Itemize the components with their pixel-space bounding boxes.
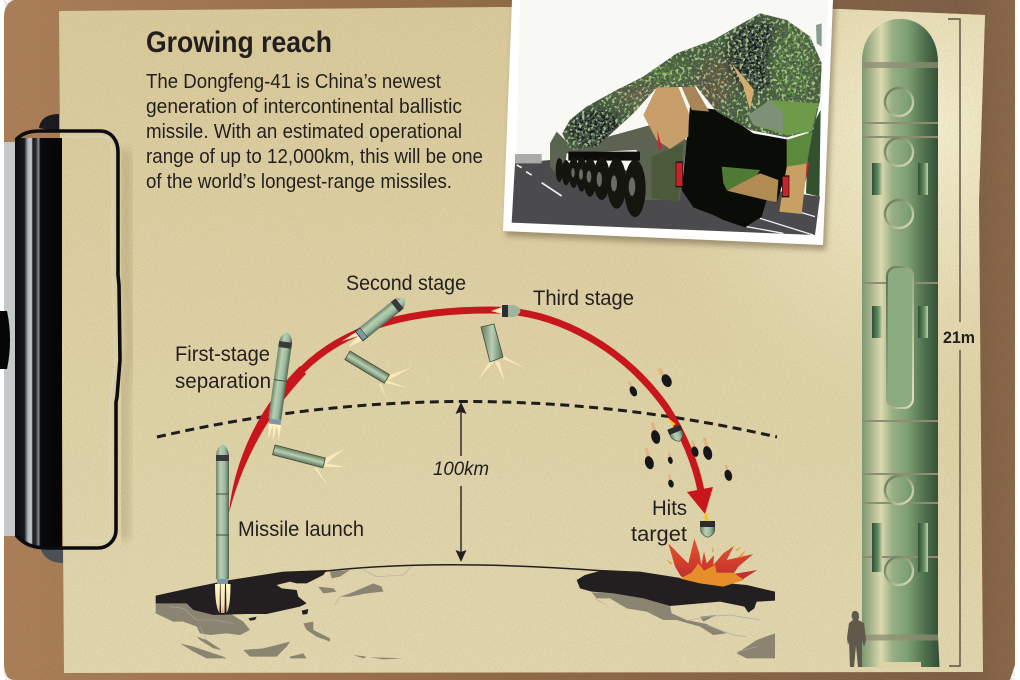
rocket: second stage bbox=[340, 294, 409, 353]
large missile elevation bbox=[858, 19, 940, 667]
label: first-stage separation: First-stage bbox=[175, 342, 270, 366]
label: first-stage separation: separation bbox=[175, 369, 271, 393]
map: horizon line bbox=[310, 565, 605, 573]
long capsule panel bbox=[887, 267, 913, 408]
label: first-stage separation bbox=[175, 342, 271, 393]
body bands bbox=[862, 65, 938, 638]
intro text: generation of intercontinental ballistic bbox=[146, 95, 462, 118]
land: Asia black bbox=[156, 570, 327, 615]
clip wire bbox=[16, 131, 120, 548]
land: Asia grey bbox=[156, 570, 403, 659]
label: hits target bbox=[631, 496, 687, 546]
warhead: re-entry bbox=[667, 418, 686, 444]
explosion bbox=[666, 538, 757, 587]
rocket: first-stage separation bbox=[265, 331, 294, 445]
map: North America bbox=[577, 570, 775, 658]
intro text: The Dongfeng-41 is China’s newest bbox=[146, 70, 441, 93]
land: America grey bbox=[592, 592, 775, 658]
spent first stage bbox=[272, 445, 345, 486]
height arrow: 100km bbox=[456, 402, 466, 562]
arrowhead: hits target bbox=[687, 487, 713, 514]
intro text: missile. With an estimated operational bbox=[146, 120, 462, 143]
flight path: red arc bbox=[229, 310, 701, 513]
spent third stage bbox=[478, 324, 525, 382]
title: Growing reach bbox=[146, 26, 332, 59]
label: second stage: Second stage bbox=[346, 271, 466, 295]
hatches: circles bbox=[885, 88, 913, 585]
clip silver plate bbox=[4, 142, 15, 536]
intro text: of the world’s longest-range missiles. bbox=[146, 170, 452, 193]
atmosphere boundary: dashed line bbox=[157, 402, 777, 437]
label: hits target: target bbox=[631, 522, 687, 546]
clip black bar bbox=[15, 138, 62, 548]
land: America black bbox=[577, 570, 775, 613]
height dimension line bbox=[948, 19, 960, 666]
side panels bbox=[872, 163, 928, 572]
height label: 100km bbox=[433, 459, 489, 480]
warhead: hitting target bbox=[700, 513, 715, 537]
clip wire shadow bbox=[124, 150, 130, 540]
land: America borders bbox=[687, 615, 760, 652]
clip side nub bbox=[0, 311, 10, 369]
photo: missile transporter bbox=[503, 0, 836, 250]
base notch bbox=[878, 662, 921, 667]
clip knob top bbox=[39, 114, 59, 132]
intro text: range of up to 12,000km, this will be one bbox=[146, 145, 483, 168]
clipboard clip bbox=[0, 114, 130, 563]
rocket: launch bbox=[215, 444, 230, 613]
bomblets: decoys bbox=[628, 368, 733, 488]
camouflage net bbox=[560, 10, 823, 153]
spent second stage bbox=[345, 351, 412, 400]
label: missile launch: Missile launch bbox=[238, 517, 364, 541]
land: Asia borders bbox=[170, 567, 412, 640]
scale: human figure bbox=[847, 611, 866, 667]
intro text bbox=[146, 70, 483, 193]
rocket: third stage warhead bbox=[491, 305, 520, 317]
clip knob bottom bbox=[41, 548, 63, 563]
height label: 21m: 21m bbox=[943, 328, 975, 347]
label: third stage: Third stage bbox=[533, 286, 634, 310]
map: Asia bbox=[156, 567, 412, 659]
label: hits target: Hits bbox=[652, 496, 687, 520]
missile body bbox=[858, 19, 940, 667]
